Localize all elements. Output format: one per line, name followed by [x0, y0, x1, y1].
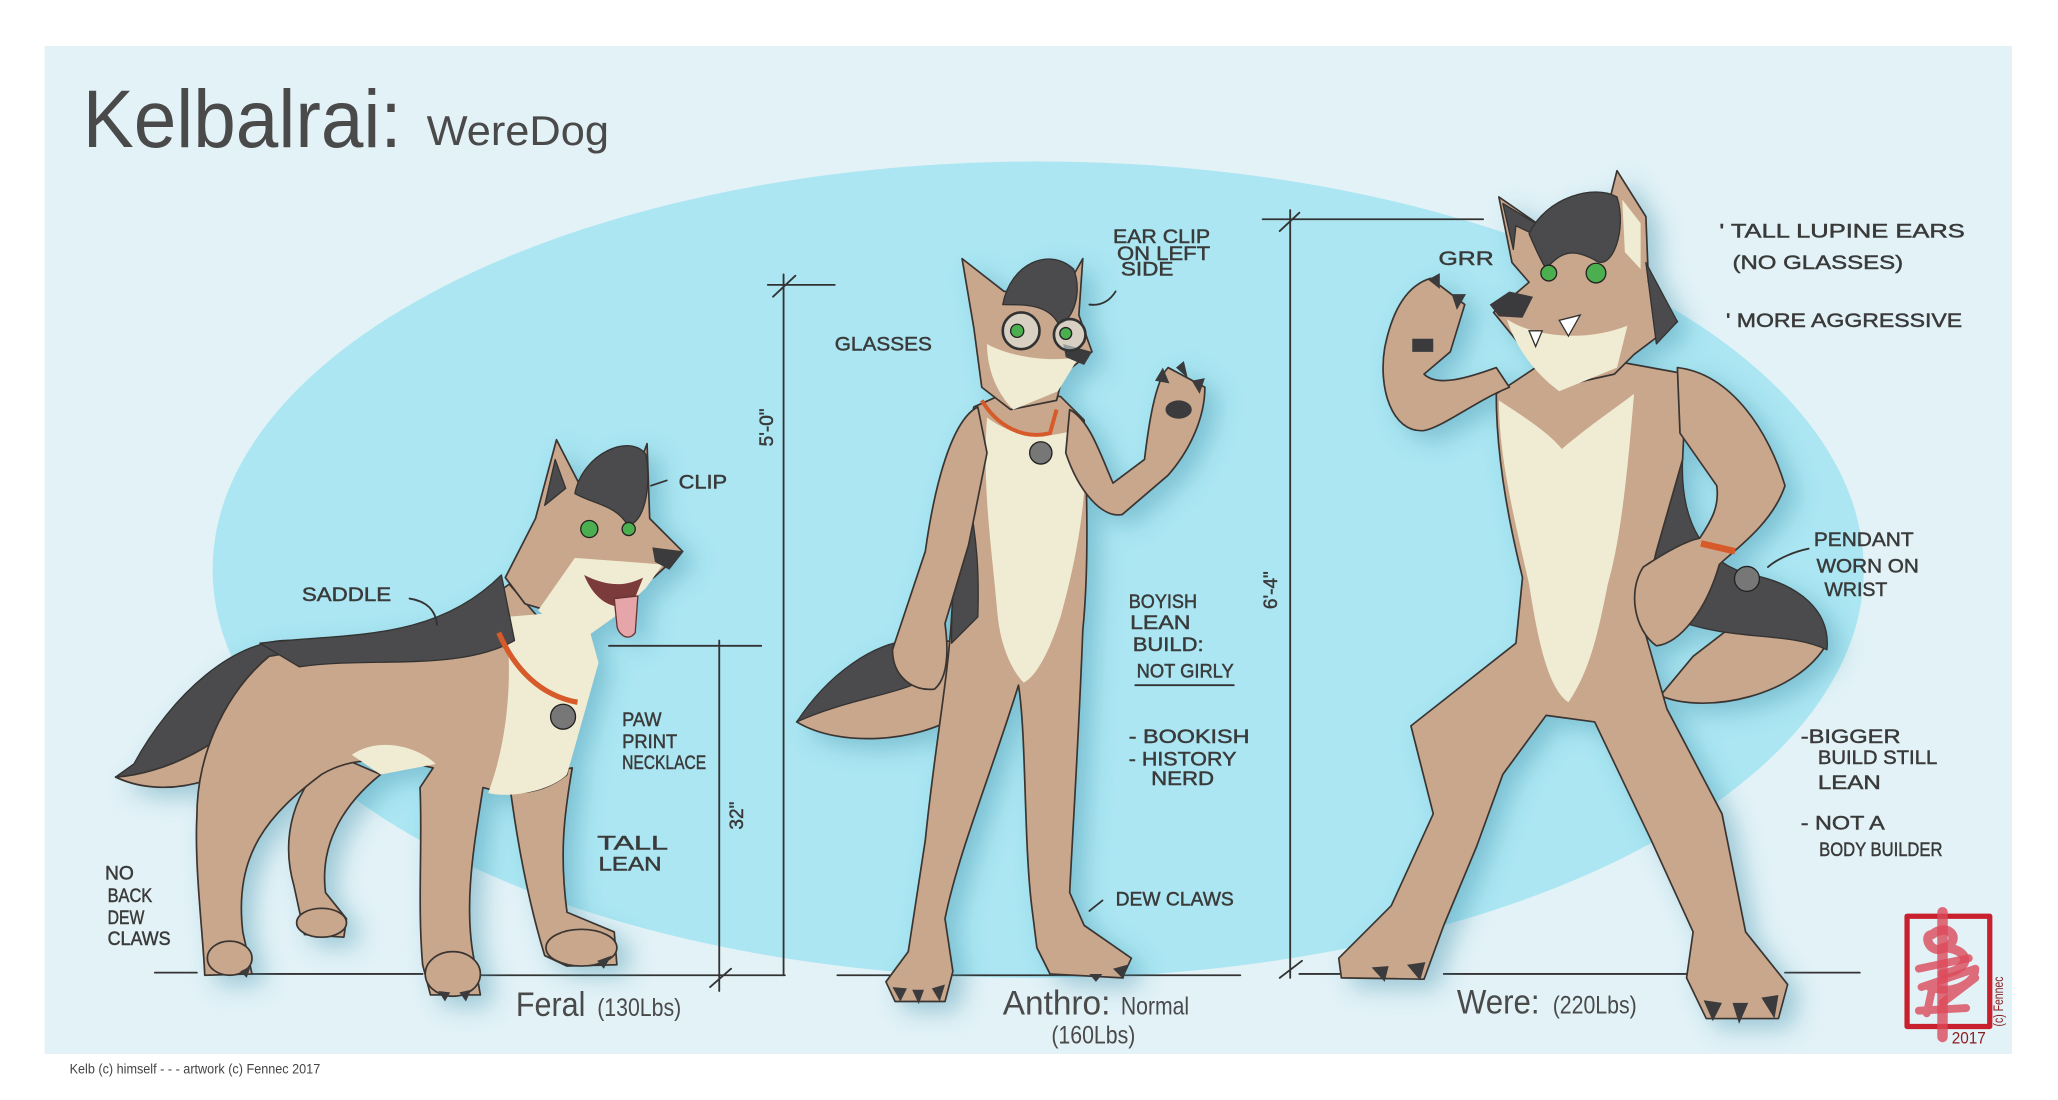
- annotations: anthro: GLASSES: [835, 335, 932, 356]
- annotations: feral: TALL: [597, 833, 668, 854]
- were raised left arm: [1383, 273, 1509, 431]
- form label: Were: Were:: [1457, 983, 1540, 1021]
- footer credit: Kelb (c) himself - - - artwork (c) Fennec 2017: [70, 1062, 320, 1077]
- annotations: anthro: SIDE: [1121, 260, 1173, 281]
- anthro glasses: [1003, 312, 1085, 350]
- measurement: were height 6 feet 4: 6'-4": [1261, 571, 1282, 609]
- annotations: feral: CLIP: [679, 472, 727, 493]
- annotations: anthro: NOT GIRLY: [1137, 661, 1234, 682]
- form label: Feral: Feral: [516, 986, 585, 1024]
- form label: Feral: (130Lbs): [597, 994, 681, 1022]
- form label: Anthro: (160Lbs): [1051, 1022, 1135, 1050]
- anthro collar and pendant: [982, 400, 1057, 464]
- were tail: [1648, 459, 1827, 703]
- measurement: anthro height 5 feet: [757, 274, 835, 975]
- title: WereDog: [427, 107, 609, 154]
- annotations: were: GRR: [1438, 249, 1494, 270]
- annotations: feral: SADDLE: [302, 585, 391, 606]
- artist stamp: [1907, 912, 1990, 1037]
- measurement: feral height 32 inches: 32": [727, 802, 748, 830]
- feral far legs: [289, 755, 617, 966]
- were right arm and hand on hip: [1635, 368, 1785, 646]
- annotations: anthro: EAR CLIP: [1113, 227, 1210, 248]
- artist credit: (c) Fennec: [1991, 976, 2006, 1026]
- measurement: feral height 32 inches: [609, 641, 761, 991]
- background ellipse: [213, 162, 1864, 978]
- stamp year: 2017: [1952, 1029, 1986, 1048]
- annotations: feral: NECKLACE: [622, 753, 706, 774]
- annotations: were: LEAN: [1818, 773, 1881, 794]
- annotations: feral: NO: [105, 863, 134, 884]
- character: were form: [1339, 171, 1827, 1024]
- annotations: anthro: BOYISH: [1129, 592, 1197, 613]
- measurement: were height 6 feet 4: [1261, 210, 1483, 978]
- feral tail: [116, 640, 295, 787]
- annotations: anthro: LEAN: [1130, 613, 1190, 634]
- annotations: were: BODY BUILDER: [1819, 840, 1942, 861]
- anthro left arm: [892, 407, 987, 689]
- annotations: were: ' TALL LUPINE EARS: [1719, 222, 1965, 243]
- were paws claws: [1372, 962, 1778, 1024]
- annotations: anthro: - BOOKISH: [1129, 727, 1250, 748]
- annotations: anthro: NERD: [1151, 769, 1214, 790]
- were body: [1339, 361, 1788, 1019]
- form label: Anthro: Anthro:: [1003, 985, 1110, 1023]
- annotations: were: [1438, 222, 1965, 861]
- feral body and near legs: [196, 575, 599, 995]
- annotations: feral: PRINT: [622, 732, 678, 753]
- anthro body: [886, 396, 1131, 1004]
- anthro tail: [797, 639, 958, 739]
- annotations: feral: CLAWS: [108, 929, 171, 950]
- annotations: were: (NO GLASSES): [1732, 253, 1903, 274]
- annotations: feral: [105, 472, 727, 950]
- annotations: were: -BIGGER: [1801, 727, 1900, 748]
- feral collar and tag: [499, 633, 578, 729]
- annotations: feral: LEAN: [598, 854, 662, 875]
- annotations: were: WORN ON: [1816, 556, 1919, 577]
- anthro head: [962, 259, 1092, 410]
- form label: Anthro: [1003, 985, 1189, 1050]
- form label: Anthro: Normal: [1121, 993, 1189, 1021]
- measurement: anthro height 5 feet: 5'-0": [757, 408, 778, 446]
- annotations: were: WRIST: [1824, 580, 1888, 601]
- were head: [1490, 171, 1677, 391]
- anthro right arm and raised paw: [1066, 361, 1205, 515]
- ground lines: [155, 973, 1860, 975]
- annotations: anthro: DEW CLAWS: [1116, 890, 1234, 911]
- annotations: anthro: [835, 227, 1250, 911]
- form label: Feral: [516, 986, 681, 1024]
- annotations: feral: PAW: [622, 710, 662, 731]
- character: feral form: [116, 440, 684, 1002]
- annotations: were: BUILD STILL: [1818, 748, 1937, 769]
- annotations: feral: DEW: [108, 908, 144, 929]
- title: [83, 74, 609, 165]
- annotations: anthro: ON LEFT: [1117, 244, 1211, 265]
- feral paws: [207, 908, 617, 1002]
- annotations: anthro: BUILD:: [1133, 635, 1204, 656]
- annotations: anthro: - HISTORY: [1129, 749, 1237, 770]
- annotations: were: - NOT A: [1801, 814, 1885, 835]
- annotations: feral: BACK: [108, 886, 153, 907]
- form label: Were: (220Lbs): [1553, 991, 1637, 1019]
- character: anthro form: [797, 259, 1205, 1004]
- feral head: [505, 440, 684, 643]
- annotations: were: ' MORE AGGRESSIVE: [1726, 311, 1962, 332]
- title: Kelbalrai:: [83, 74, 402, 165]
- form label: Were: [1457, 983, 1637, 1021]
- annotations: were: PENDANT: [1814, 530, 1914, 551]
